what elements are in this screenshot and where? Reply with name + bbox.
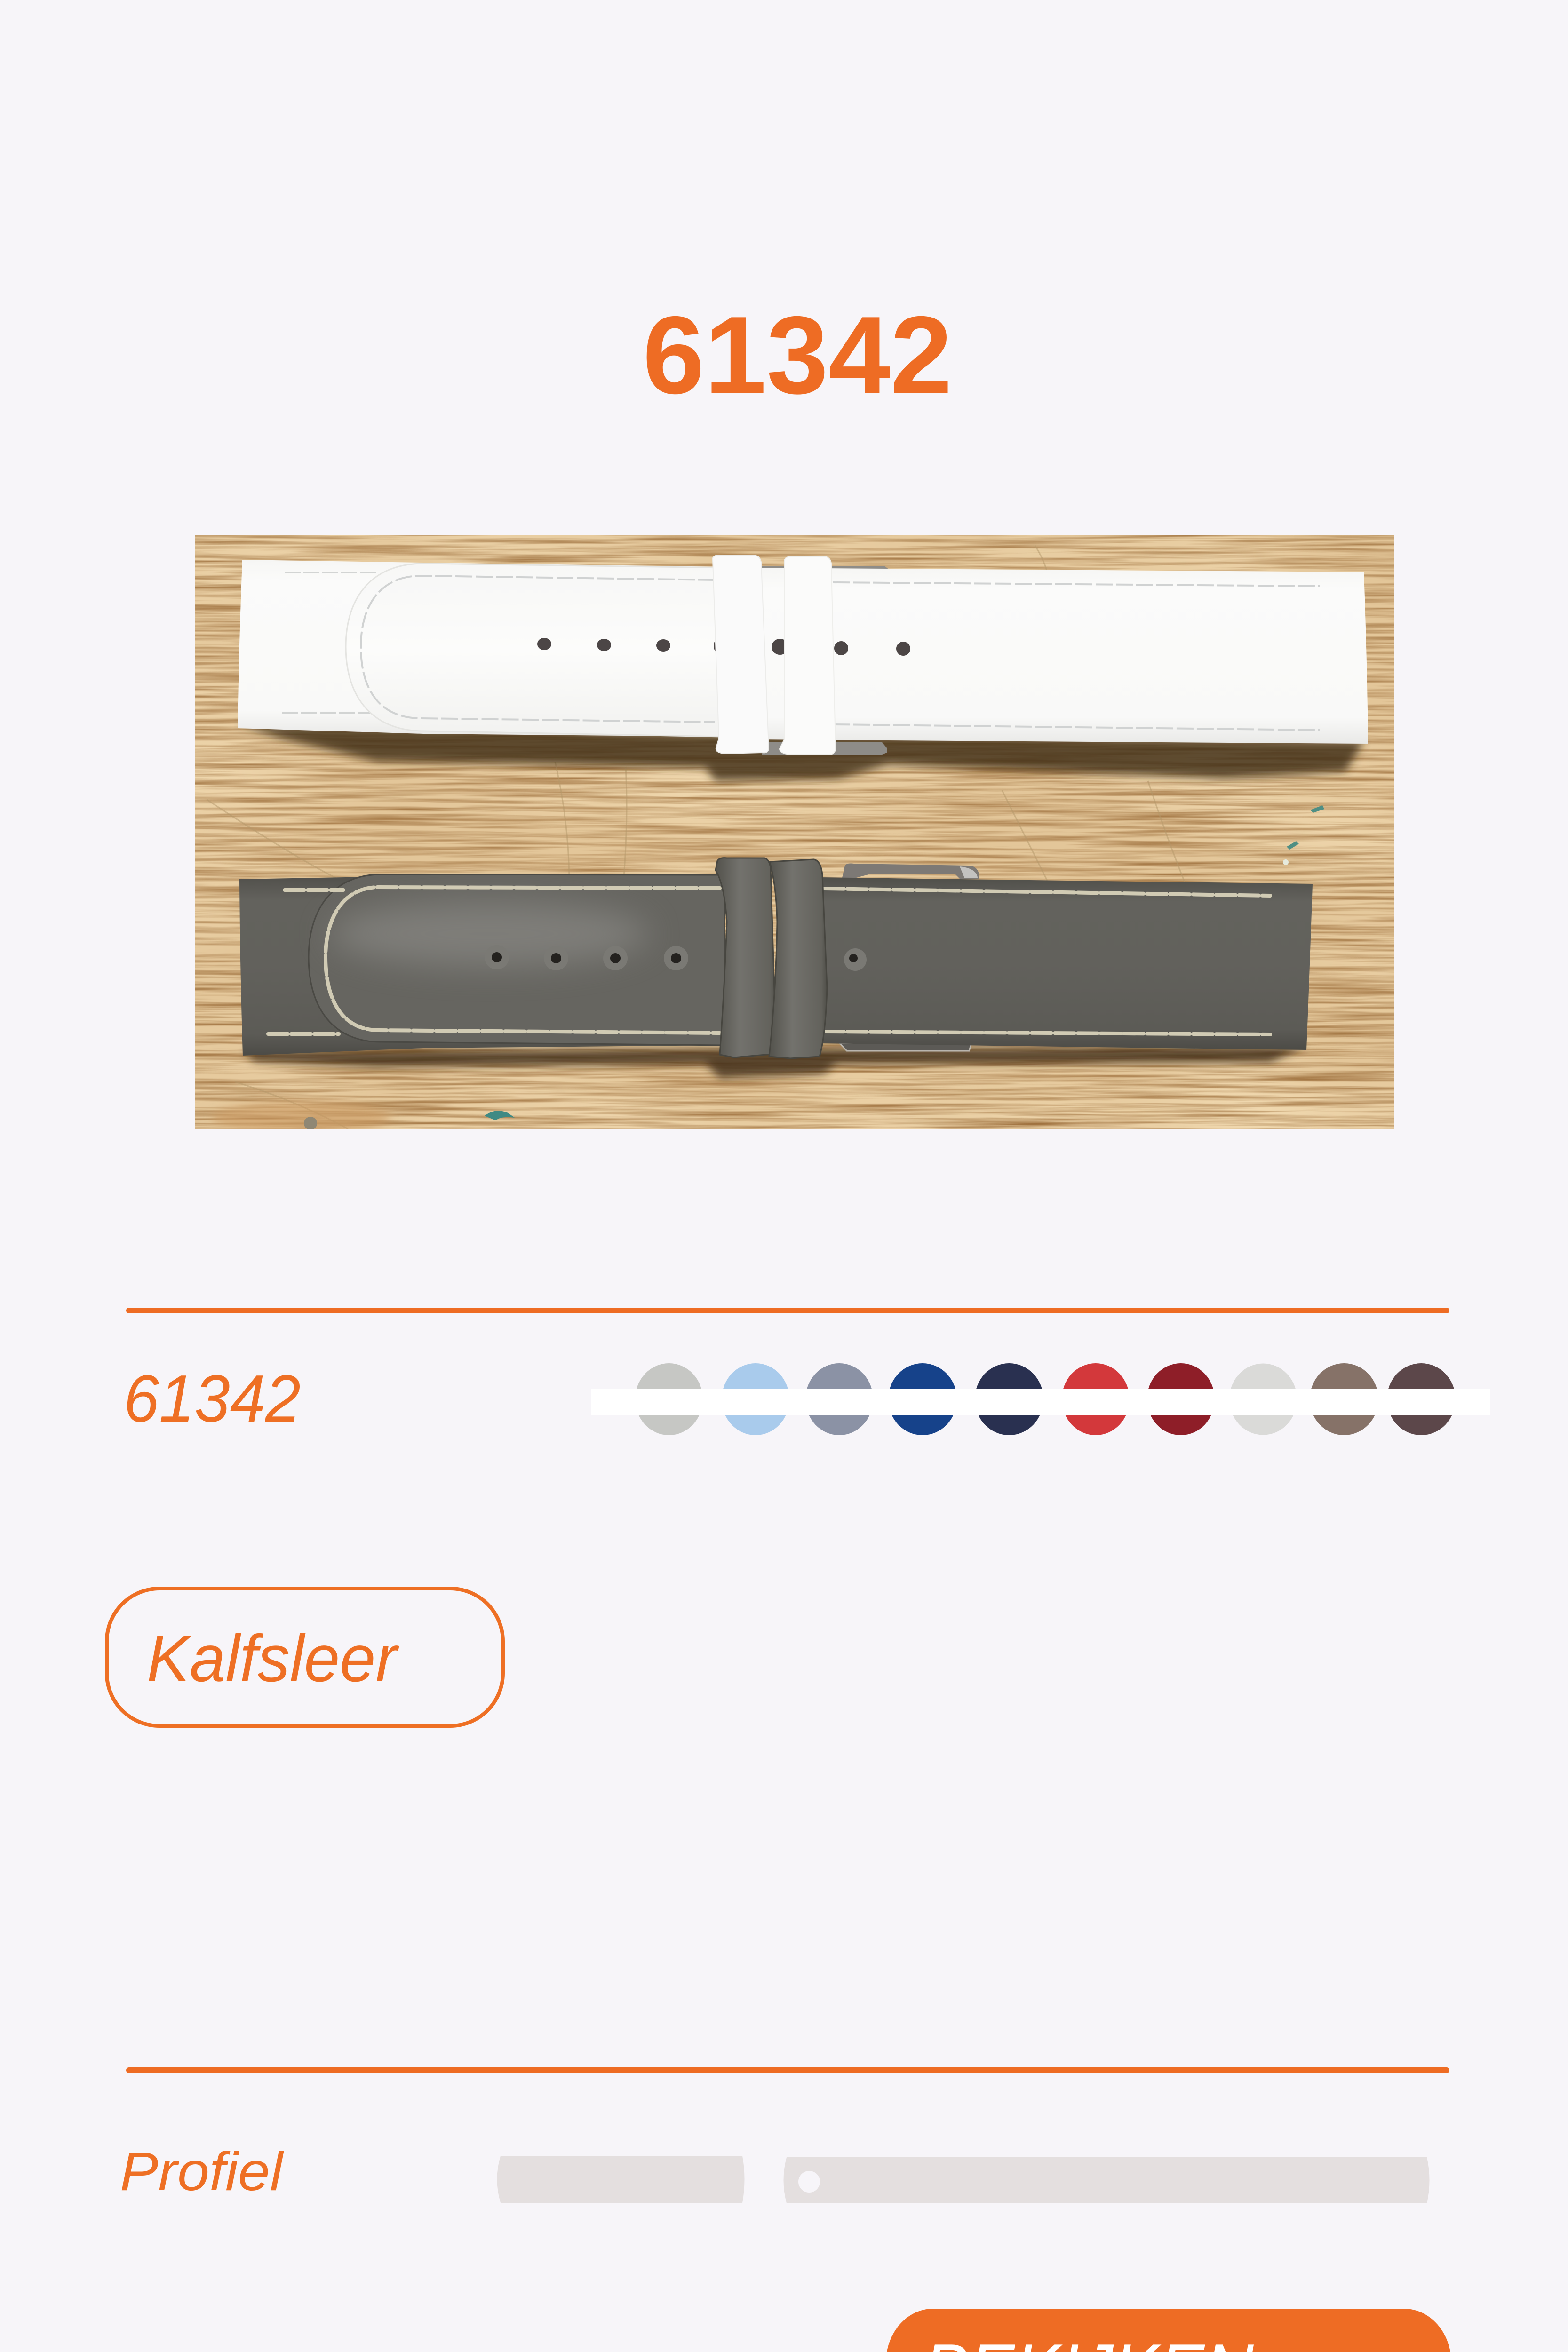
bottom divider rule — [126, 2067, 1449, 2073]
profile bar: short segment — [497, 2156, 744, 2203]
dark strap overlay with rounded end — [309, 874, 724, 1045]
white band across swatches — [591, 1389, 1490, 1415]
dark strap — [239, 858, 1313, 1058]
white strap — [238, 555, 1368, 755]
profile marker dot — [798, 2171, 820, 2193]
dark strap tail — [239, 875, 724, 1056]
strap shadows — [238, 724, 1364, 1078]
product code label: 61342 — [124, 1361, 301, 1436]
colour swatches — [591, 1363, 1490, 1435]
white strap stitching — [361, 576, 1320, 730]
white strap holes — [537, 638, 910, 656]
product photo: two watch straps on wood — [195, 535, 1394, 1133]
title: 61342 — [643, 293, 952, 417]
dark strap buckle side — [819, 877, 1313, 1050]
profile label: Profiel — [120, 2141, 284, 2202]
top divider rule — [126, 1308, 1449, 1313]
white strap tail — [238, 560, 724, 737]
white strap keepers — [713, 555, 769, 754]
dark strap buckle — [842, 864, 979, 879]
wooden table surface — [195, 535, 1394, 1133]
white strap overlay with rounded end — [346, 564, 724, 737]
dark strap stitching — [268, 887, 1270, 1034]
white strap stitches left — [282, 572, 376, 713]
dark strap keepers — [716, 858, 776, 1057]
white strap buckle — [762, 566, 889, 755]
view button — [886, 2309, 1451, 2352]
profile bar: long segment — [784, 2157, 1429, 2203]
dark strap holes — [485, 945, 867, 971]
dark strap highlight — [329, 901, 649, 967]
material tag — [107, 1589, 503, 1726]
white strap buckle side — [753, 568, 1368, 744]
material tag: Kalfsleer — [147, 1621, 399, 1695]
